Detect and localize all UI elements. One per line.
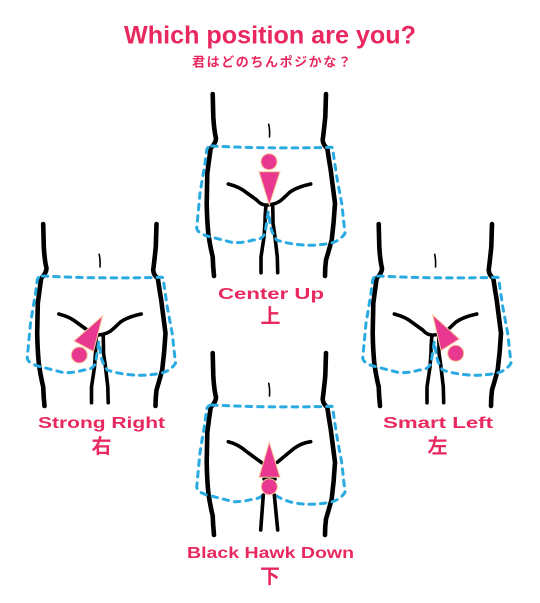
label: kanji left: 左 [428,435,448,458]
figure: center up [197,94,345,276]
icon: triangle and circle pointing to lower left [71,316,102,363]
icon: triangle and circle pointing down [259,154,280,205]
icon: triangle pointing up with circle below [259,442,280,495]
title: Which position are you? [124,22,416,50]
label: center up: Center Up [218,286,324,303]
figure: strong right [27,224,176,406]
label: smart left: Smart Left [383,415,494,432]
subtitle: 君はどのちんポジかな？ [192,54,351,70]
figure: smart left [363,224,511,406]
arms and legs of lower figure [228,442,311,530]
label: strong right: Strong Right [38,415,166,432]
label: kanji up: 上 [260,305,280,328]
label: kanji down: 下 [260,566,280,588]
label: black hawk down: Black Hawk Down [187,545,354,562]
label: kanji right: 右 [92,435,112,458]
figure: black hawk down [197,353,345,535]
icon: triangle and circle pointing to lower right [433,315,464,361]
